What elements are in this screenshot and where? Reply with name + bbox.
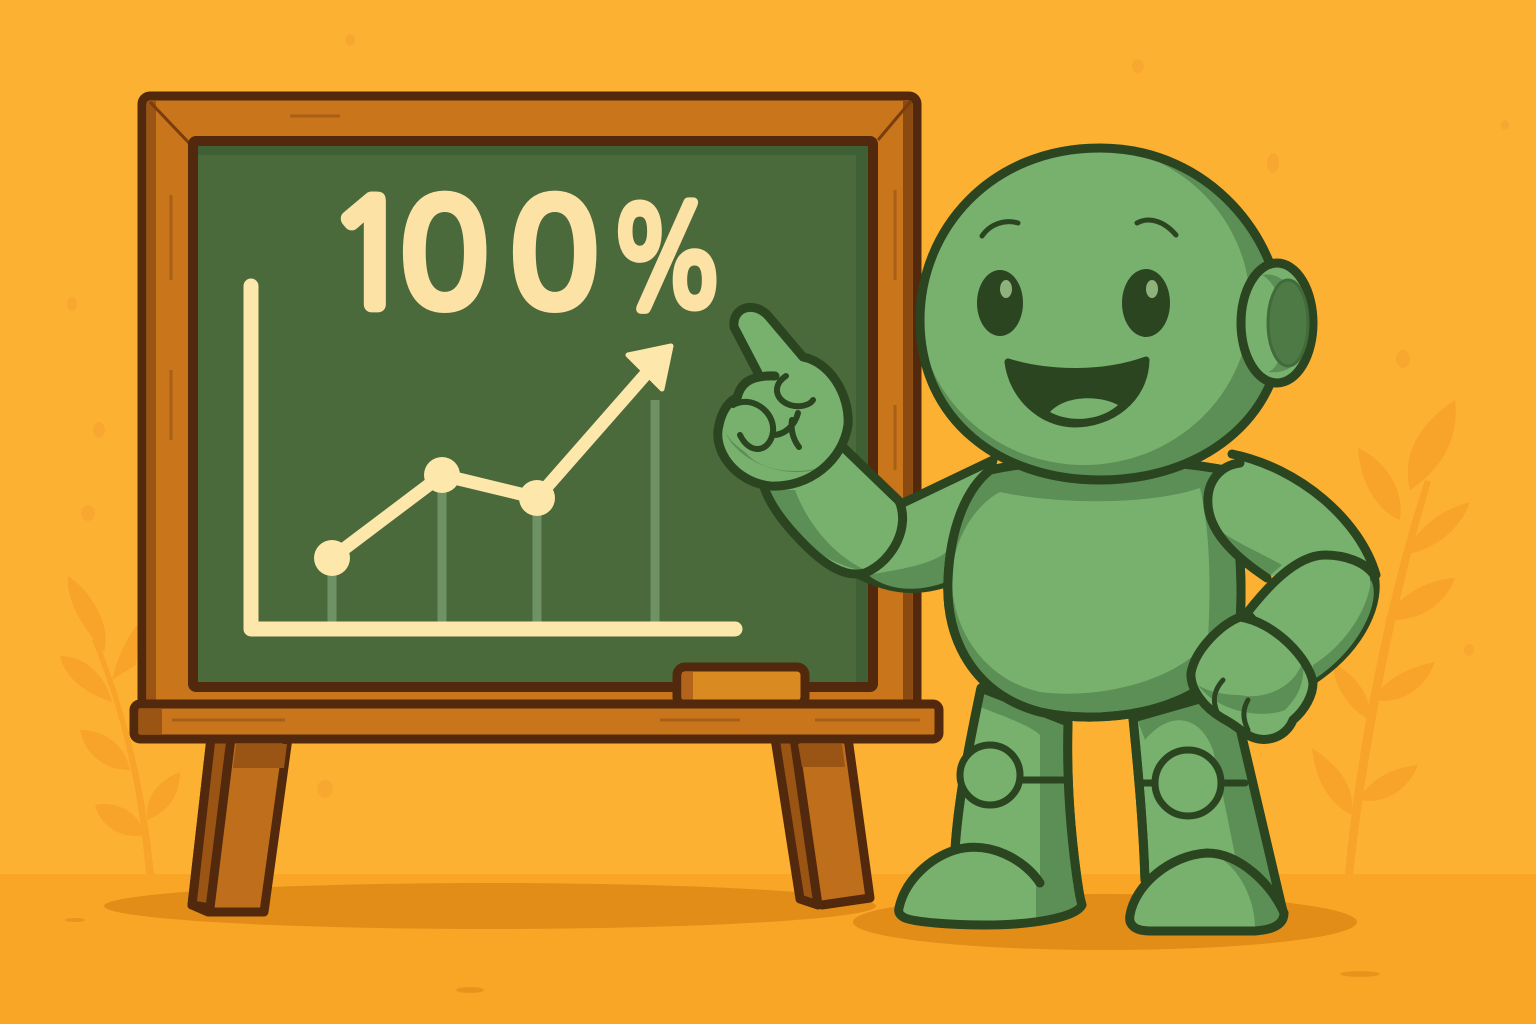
torso <box>948 460 1241 717</box>
heading: 100%: 100 <box>326 182 598 328</box>
board frame <box>142 96 917 708</box>
head <box>918 145 1282 480</box>
mouth <box>1008 360 1146 424</box>
right upper arm <box>1208 454 1376 578</box>
chart <box>251 286 735 629</box>
left foot <box>899 847 1082 925</box>
left leg <box>955 688 1085 920</box>
easel tray and eraser <box>134 667 939 739</box>
heading: 100%: % <box>608 191 727 327</box>
pointing upper arm <box>860 460 993 589</box>
chalkboard <box>193 141 873 687</box>
right foot <box>1130 853 1284 931</box>
chart line <box>332 375 645 558</box>
eyes <box>977 269 1170 337</box>
pointing forearm <box>764 447 903 574</box>
wall speckles <box>67 34 1509 798</box>
headphone <box>1241 263 1313 383</box>
pointing hand <box>718 307 848 486</box>
right forearm <box>1247 555 1375 680</box>
right leg <box>1128 698 1288 910</box>
right hand <box>1191 617 1313 739</box>
plant left <box>60 576 180 875</box>
floor <box>0 874 1536 1024</box>
pointing upper arm shade <box>868 550 948 589</box>
easel legs <box>192 738 870 912</box>
chart axes <box>251 286 735 629</box>
heading: 100% <box>326 182 727 328</box>
floor shadows <box>104 883 1357 950</box>
arrow head <box>628 346 671 389</box>
data points <box>314 457 555 576</box>
eyebrows <box>982 220 1176 236</box>
robot <box>718 145 1376 931</box>
plant right <box>1312 400 1470 875</box>
